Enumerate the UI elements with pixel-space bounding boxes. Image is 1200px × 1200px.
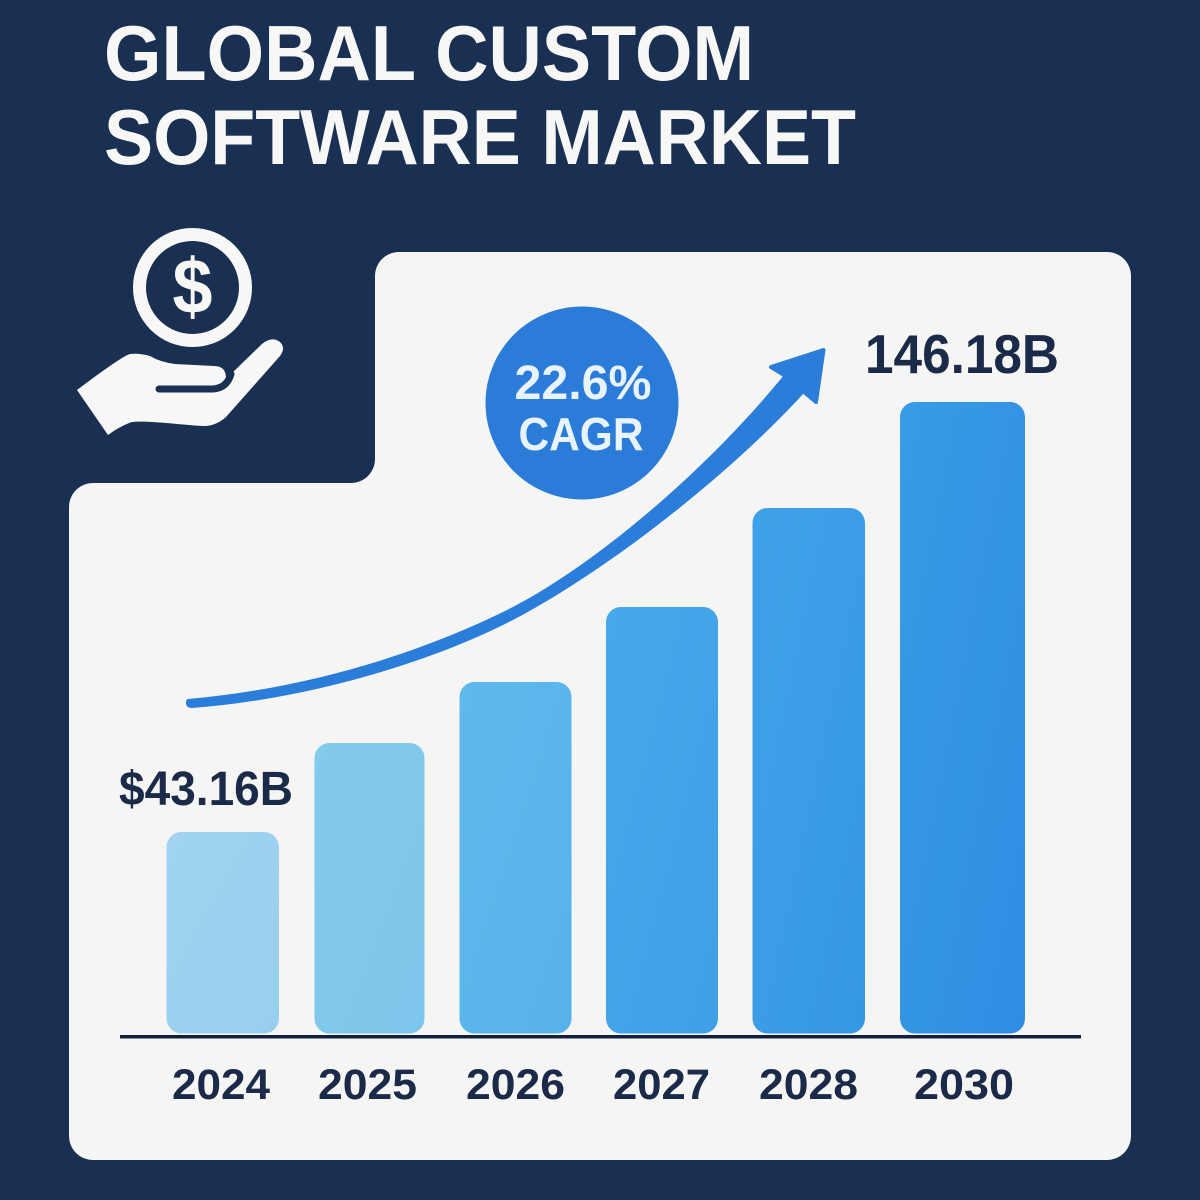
bar: 2025 [314, 743, 424, 1034]
year labels [172, 1061, 1014, 1109]
CAGR badge [486, 306, 678, 500]
year labels: 2024 [172, 1061, 270, 1109]
CAGR badge: CAGR [518, 408, 644, 460]
bar: 2028 [752, 508, 865, 1034]
year labels: 2025 [318, 1061, 417, 1109]
growth arrow [186, 350, 824, 708]
CAGR badge: 22.6% [514, 357, 652, 410]
year labels: 2028 [759, 1061, 858, 1109]
title: SOFTWARE MARKET [104, 93, 856, 181]
chart baseline [120, 1035, 1081, 1038]
bar: 2024 [166, 832, 279, 1034]
bar: 2026 [460, 682, 572, 1034]
year labels: 2030 [914, 1061, 1014, 1109]
icon: hand holding dollar coin: $ [172, 242, 212, 330]
year labels: 2027 [613, 1061, 710, 1109]
bar: 2030 [900, 402, 1025, 1034]
title: GLOBAL CUSTOM [104, 9, 754, 97]
value label: 2030: 146.18B [865, 323, 1059, 385]
icon: hand holding dollar coin [77, 234, 283, 435]
bar: 2027 [606, 607, 718, 1034]
value label: 2024: $43.16B [119, 763, 293, 816]
title [104, 9, 856, 181]
year labels: 2026 [466, 1061, 565, 1109]
panel: chart background [69, 252, 1131, 1160]
